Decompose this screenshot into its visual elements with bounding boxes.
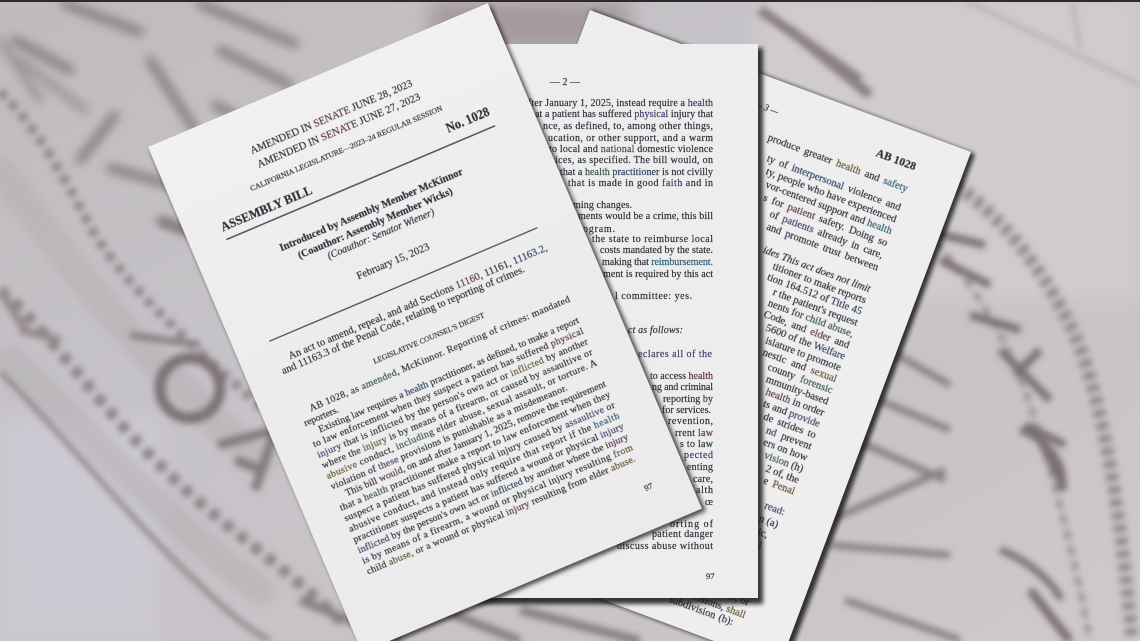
page 2 text: orting of xyxy=(670,519,714,530)
assembly bill label: ASSEMBLY BILL xyxy=(218,182,315,234)
page 3 text: 5600 of the Welfare xyxy=(764,323,847,363)
top-left seal relief strokes xyxy=(15,4,295,240)
rule one xyxy=(226,125,496,240)
page 3 text: Code, and elder and xyxy=(762,309,852,351)
outer bead ring right xyxy=(955,185,1132,641)
digest body: that a health practitioner make a report to law enforcement when they xyxy=(338,389,612,514)
page 2 text: that a health practitioner is not civilly xyxy=(560,167,713,178)
page 2 text: ments would be a crime, this bill xyxy=(578,211,713,222)
page 2 text: enting xyxy=(687,462,713,473)
page 2 text: fter January 1, 2025, instead require a health xyxy=(528,98,713,109)
page 3 text: titioner to make reports xyxy=(771,261,868,306)
page 3 text: al xyxy=(752,538,764,551)
bill number: No. 1028 xyxy=(444,105,492,136)
page 2 text: care, xyxy=(693,474,713,485)
page 2 text: to local and national domestic violence xyxy=(549,144,714,155)
page 3 shadow xyxy=(398,10,975,641)
digest body: Existing law requires a health practitioner, as defined, to make a report xyxy=(317,315,581,435)
bottom edge between pages xyxy=(300,600,640,641)
page 3 text: and promote trust between xyxy=(765,222,880,274)
digest body: is by means of a firearm, a wound or physical injury resulting from xyxy=(361,442,635,567)
page 3 text: nents for child abuse, xyxy=(766,298,855,340)
page 3 text: s for patient safety. Doing so xyxy=(762,193,889,249)
digest body: practitioner suspects a patient has suffered a wound or physical injury xyxy=(352,421,626,546)
outer bead ring left xyxy=(0,290,345,625)
page 3 text: r the patient's request xyxy=(771,287,859,329)
digest body: reporters. xyxy=(302,404,341,429)
page 3 text xyxy=(579,98,920,633)
page number: 97 xyxy=(642,481,654,493)
page 3 text: nestic and sexual xyxy=(761,347,838,385)
header: amendment dates: AMENDED IN SENATE JUNE 28, 2023 xyxy=(248,77,415,157)
page 3 text: nd prevent xyxy=(764,425,813,452)
authors and date: (Coauthor: Assembly Member Wicks) xyxy=(296,186,455,262)
page 3 text: islature to promote xyxy=(764,335,843,374)
page 3 text: vision (h) xyxy=(763,450,805,475)
act title xyxy=(276,243,563,400)
page 2 text: that is made in good faith and in xyxy=(568,178,713,189)
digest body: suspect a patient has suffered physical injury caused by assaultive or xyxy=(343,400,617,524)
header: amendment dates: CALIFORNIA LEGISLATURE—2023–24 REGULAR SESSION xyxy=(249,105,444,193)
page 2 text: 97 xyxy=(706,571,714,581)
page 2 text xyxy=(528,77,714,581)
soft shaded zones of the seal xyxy=(0,170,260,590)
page 3 text: ides This act does not limit xyxy=(761,245,873,295)
page 3 text: county forensic xyxy=(766,362,834,396)
page 2 text: to access health xyxy=(650,371,713,382)
page 3 text: ty, people who have experienced xyxy=(764,167,898,226)
page 2 text: ce xyxy=(705,497,714,508)
page 3 text: — 3 — xyxy=(752,98,781,117)
panel: bill page 1 cover xyxy=(148,3,702,641)
top right architectural lines xyxy=(965,0,1140,85)
inner ring right xyxy=(925,230,1090,641)
page 3 text: 2 of, the xyxy=(764,464,801,486)
page 3 text: ers on how xyxy=(762,437,809,464)
page 3 text: read: xyxy=(763,501,787,518)
page 3 text: AB 1028 xyxy=(874,147,918,173)
page 2 text: at a patient has suffered physical injury that xyxy=(535,109,713,120)
page 3 text: ts and provide xyxy=(761,399,822,430)
page 2 text: ucation, or other support, and a warm xyxy=(548,133,713,144)
seal letter C/O xyxy=(160,358,220,418)
page 2 text: ming changes. xyxy=(573,200,632,211)
act title: An act to amend, repeal, and add Sections 11160, 11161, 11163.2, xyxy=(287,243,549,362)
digest body: This bill would, on and after January 1, 2025, remove the requirement xyxy=(344,379,608,499)
digest body xyxy=(298,294,640,577)
page 3 text: tic, xyxy=(753,526,770,541)
page 3 text: subdivision (b): xyxy=(667,594,735,628)
page 3 text: vor-centered support and health xyxy=(764,180,894,237)
page 3 text: mmunity-based xyxy=(764,374,831,408)
page 2 text: ment is required by this act xyxy=(603,269,713,280)
seal letter A xyxy=(218,430,275,490)
page 2 text: alth xyxy=(696,485,713,496)
page 3 text: d xyxy=(744,546,753,558)
top middle right relief xyxy=(760,10,870,95)
page 3 sheet xyxy=(399,10,971,641)
authors and date xyxy=(278,167,487,306)
act title: and 11163.3 of the Penal Code, relating to reporting of crimes. xyxy=(280,264,527,377)
page 1 shadow xyxy=(150,6,706,641)
page 2 text: costs mandated by the state. xyxy=(600,245,713,256)
digest body: abusive conduct, including elder abuse, sexual assault, or torture. A xyxy=(325,357,600,482)
page 3 text: provisions, or xyxy=(692,578,751,609)
page 1 sheet xyxy=(148,3,702,641)
page 2 text: patient danger xyxy=(652,529,714,540)
page 2 text: pected xyxy=(684,450,713,461)
page 2 sheet xyxy=(400,44,758,598)
inner bead ring left xyxy=(0,92,290,432)
digest body: to law enforcement when they suspect a patient has suffered physical xyxy=(311,326,586,450)
panel: bill page 2 xyxy=(400,44,758,598)
page 2 text: nce, as defined, to, among other things, xyxy=(543,121,713,132)
page 2 text: discuss abuse without xyxy=(617,541,713,552)
page 3 text: ty of interpersonal violence and xyxy=(765,154,903,214)
page 3 text: de strides to xyxy=(762,412,817,441)
page 3 text: produce greater health and safety xyxy=(766,133,910,195)
page 3 text: divisions, shall xyxy=(684,588,747,621)
page 2 text: s to law xyxy=(680,439,714,450)
page 3 text: health in order xyxy=(764,387,826,419)
header: amendment dates xyxy=(235,70,444,193)
page 2 text: reporting by xyxy=(663,394,713,405)
page 3 text: n (a) xyxy=(757,514,780,531)
act title: LEGISLATIVE COUNSEL'S DIGEST xyxy=(372,311,486,366)
digest body: violation of these provisions is punishable as a misdemeanor. xyxy=(329,383,569,493)
panel: bill page 3 xyxy=(399,10,971,641)
page 3 text: of patients already in care, xyxy=(768,209,884,261)
page 2 text: ogram. xyxy=(583,224,615,235)
page 3 text: tion 164.512 of Title 45 xyxy=(766,272,863,318)
authors and date: Introduced by Assembly Member McKinnor xyxy=(278,167,465,254)
page 2 text: revention, xyxy=(668,416,713,427)
page 2 text: rrent law xyxy=(675,428,714,439)
digest body: child abuse, or a wound or physical injury resulting from elder abuse. xyxy=(365,454,637,577)
page 2 text: ct as follows: xyxy=(628,325,683,336)
page 2 text: ng and criminal xyxy=(652,382,713,393)
page 2 text: for services. xyxy=(662,405,711,416)
inner seal relief lines xyxy=(830,345,960,640)
digest body: abusive conduct, and instead only require that report if the health xyxy=(347,411,621,535)
page 3 text: e Penal xyxy=(762,476,796,497)
page 2 text: eclares all of the xyxy=(638,349,713,360)
header: amendment dates: AMENDED IN SENATE JUNE 27, 2023 xyxy=(255,91,423,171)
authors and date: (Coauthor: Senator Wiener) xyxy=(326,207,437,262)
page 2 text: making that reimbursement. xyxy=(602,257,713,268)
digest body: injury that is inflicted by the person's own act or inflicted by another xyxy=(316,336,590,461)
rule two xyxy=(269,227,538,342)
authors and date: February 15, 2023 xyxy=(355,242,431,282)
page 2 text: the state to reimburse local xyxy=(592,234,713,245)
seal letters right xyxy=(930,232,1065,490)
page 2 text: — 2 — xyxy=(549,77,581,88)
digest body: inflicted by the person's own act or inflicted by another where the injury xyxy=(356,432,630,556)
page 3 text: ) xyxy=(740,559,748,571)
page 2 text: l committee: yes. xyxy=(615,291,692,302)
page 2 text: ices, as specified. The bill would, on xyxy=(555,155,713,166)
top dark video edge xyxy=(0,0,1140,2)
page 2 shadow xyxy=(404,48,763,604)
digest body: AB 1028, as amended, McKinnor. Reporting of crimes: mandated xyxy=(308,294,572,414)
digest body: where the injury is by means of a firearm, or caused by assaultive or xyxy=(320,347,595,471)
